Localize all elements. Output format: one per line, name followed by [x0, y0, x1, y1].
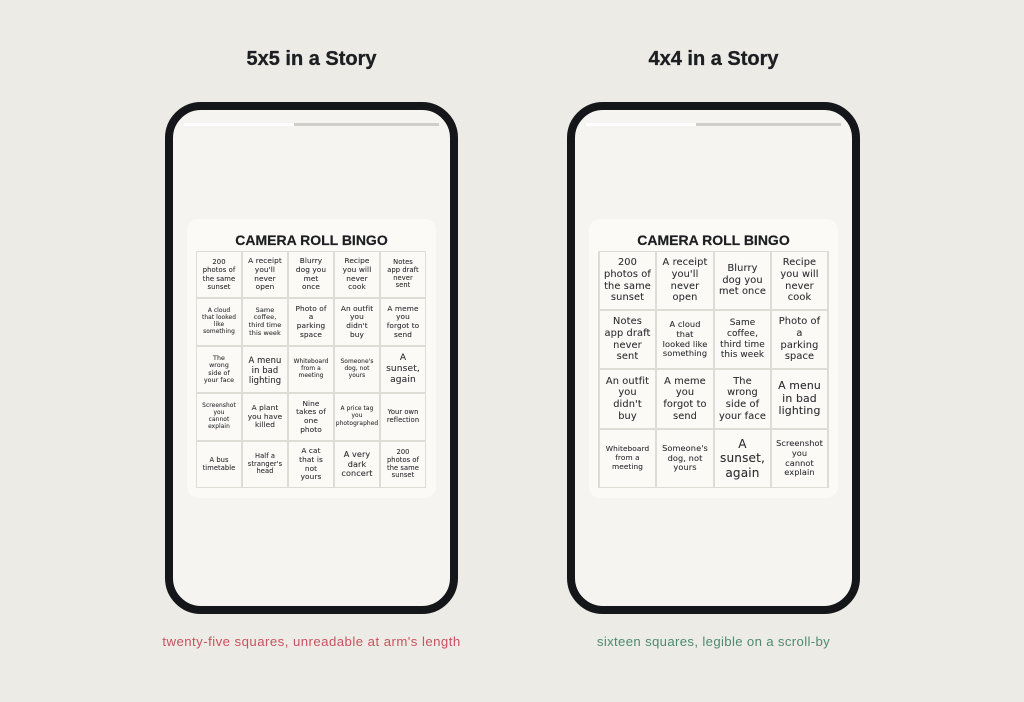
- cell: [772, 370, 827, 428]
- cell: [657, 252, 713, 309]
- cell: you: [396, 312, 410, 321]
- cell: side of: [208, 370, 230, 376]
- cell: cook: [788, 292, 811, 303]
- cell: [600, 430, 655, 487]
- cell: you: [618, 387, 637, 398]
- cell: [335, 347, 379, 392]
- card title: 4x4: CAMERA ROLL BINGO: [637, 232, 790, 248]
- cell: dog, not: [668, 453, 702, 463]
- cell: that: [676, 329, 694, 339]
- cell: one: [304, 416, 318, 425]
- cell: wrong: [209, 362, 229, 369]
- cell: A menu: [249, 354, 281, 364]
- cell: timetable: [203, 464, 235, 472]
- progress bar track: 5x5: [294, 123, 439, 126]
- cell: 200: [618, 257, 637, 268]
- cell: from a: [615, 453, 640, 462]
- progress bar fill: 4x4: [586, 123, 696, 126]
- cell: never: [785, 280, 814, 292]
- cell: Someone's: [340, 359, 374, 365]
- cell: Screenshot: [202, 403, 236, 409]
- cell: third time: [720, 340, 765, 350]
- cell: Photo of: [779, 316, 820, 327]
- cell: An outfit: [341, 304, 373, 313]
- cell: Blurry: [300, 256, 322, 265]
- cell: that looked: [202, 315, 236, 321]
- cell: send: [394, 330, 412, 339]
- cell: [657, 311, 713, 368]
- cell: you will: [780, 269, 819, 280]
- bingo grid: 4x4: [598, 251, 829, 488]
- cell: app draft: [604, 328, 650, 339]
- cell: The: [733, 376, 752, 387]
- cell: you: [351, 413, 363, 419]
- cell: like: [214, 322, 224, 328]
- cell: something: [203, 329, 235, 335]
- caption: 5x5: twenty-five squares, unreadable at arm's length: [162, 634, 461, 649]
- cell: forgot to: [663, 399, 707, 410]
- cell: [289, 252, 333, 297]
- cell: wrong: [727, 387, 758, 398]
- cell: sunset: [611, 292, 644, 303]
- cell: concert: [341, 468, 373, 478]
- cell: a: [309, 312, 313, 321]
- card title: 5x5: CAMERA ROLL BINGO: [235, 232, 388, 248]
- cell: [243, 394, 287, 440]
- cell: open: [673, 292, 697, 303]
- cell: [772, 311, 827, 368]
- cell: again: [725, 466, 760, 480]
- progress bar track: 4x4: [696, 123, 841, 126]
- cell: didn't: [613, 399, 642, 410]
- cell: you: [213, 410, 225, 416]
- cell: forgot to: [387, 321, 419, 330]
- cell: A price tag: [341, 406, 373, 412]
- cell: A cat: [301, 446, 321, 455]
- cell: this week: [249, 329, 281, 337]
- cell: photos of: [604, 269, 651, 280]
- cell: [289, 347, 333, 392]
- cell: reflection: [387, 416, 419, 424]
- cell: the same: [604, 280, 651, 292]
- cell: [381, 347, 425, 392]
- cell: A receipt: [248, 256, 282, 265]
- cell: you'll: [255, 265, 275, 274]
- cell: Notes: [613, 316, 642, 327]
- cell: coffee,: [254, 313, 276, 321]
- cell: [335, 442, 379, 487]
- cell: [381, 252, 425, 297]
- cell: sunset,: [720, 451, 765, 465]
- cell: A cloud: [208, 308, 230, 314]
- cell: this week: [721, 350, 764, 360]
- cell: cannot: [209, 417, 229, 423]
- cell: [197, 252, 241, 297]
- cell: [381, 299, 425, 345]
- cell: [197, 347, 241, 392]
- cell: Recipe: [783, 257, 816, 268]
- cell: An outfit: [606, 376, 649, 387]
- cell: buy: [618, 411, 637, 422]
- cell: [197, 394, 241, 440]
- cell: [197, 442, 241, 487]
- cell: [657, 430, 713, 487]
- cell: a: [796, 328, 803, 339]
- cell: A plant: [252, 403, 278, 412]
- cell: Someone's: [662, 443, 708, 453]
- cell: space: [300, 330, 322, 339]
- cell: third time: [249, 321, 281, 329]
- cell: A meme: [387, 304, 419, 313]
- cell: coffee,: [727, 329, 758, 339]
- caption: 4x4: sixteen squares, legible on a scroll-by: [597, 634, 830, 649]
- cell: The: [213, 355, 225, 362]
- cell: looked like: [663, 338, 707, 348]
- cell: A cloud: [669, 319, 701, 329]
- cell: yours: [301, 472, 321, 481]
- cell: [772, 430, 827, 487]
- cell: never: [671, 280, 699, 292]
- cell: photos of: [387, 456, 419, 464]
- cell: met once: [719, 286, 766, 297]
- cell: Recipe: [344, 256, 370, 265]
- cell: Nine: [302, 399, 320, 408]
- cell: you: [350, 312, 364, 321]
- cell: [289, 394, 333, 440]
- cell: dog you: [296, 265, 326, 274]
- cell: [715, 370, 770, 428]
- cell: dog you: [722, 275, 763, 286]
- cell: explain: [208, 424, 230, 430]
- cell: open: [256, 282, 274, 291]
- cell: Same: [256, 306, 274, 314]
- cell: buy: [350, 330, 364, 339]
- cell: meeting: [299, 373, 323, 379]
- cell: from a: [301, 366, 321, 372]
- cell: Blurry: [727, 263, 758, 274]
- cell: yours: [673, 462, 697, 472]
- cell: space: [785, 351, 814, 362]
- cell: again: [390, 375, 416, 385]
- bingo card: 5x5: [187, 219, 436, 498]
- cell: never: [346, 274, 368, 282]
- cell: sunset: [207, 283, 231, 291]
- cell: sunset,: [386, 364, 420, 374]
- bingo card: 4x4: [589, 219, 838, 498]
- cell: [715, 252, 770, 309]
- cell: [243, 347, 287, 392]
- cell: yours: [349, 373, 365, 379]
- cell: [243, 252, 287, 297]
- heading: 5x5 in a Story: 5x5 in a Story: [246, 48, 377, 70]
- cell: didn't: [346, 321, 368, 330]
- cell: [657, 370, 713, 428]
- cell: Notes: [393, 258, 413, 266]
- cell: A very: [344, 449, 370, 459]
- cell: [197, 299, 241, 345]
- cell: Photo of: [295, 304, 327, 313]
- cell: head: [256, 467, 274, 475]
- cell: A bus: [209, 456, 229, 464]
- cell: in bad: [252, 364, 278, 374]
- cell: Your own: [388, 408, 418, 416]
- cell: [715, 311, 770, 368]
- cell: [600, 252, 655, 309]
- cell: Half a: [255, 452, 275, 460]
- cell: sunset: [392, 471, 414, 479]
- cell: send: [673, 411, 697, 422]
- cell: the same: [387, 464, 419, 472]
- cell: stranger's: [248, 460, 282, 468]
- cell: [381, 442, 425, 487]
- cell: [335, 252, 379, 297]
- cell: you'll: [672, 269, 698, 280]
- cell: not: [305, 464, 317, 472]
- cell: Same: [730, 318, 755, 328]
- cell: once: [302, 282, 320, 291]
- cell: [600, 370, 655, 428]
- bingo grid: 5x5: [196, 251, 426, 488]
- cell: that is: [299, 455, 323, 464]
- cell: cook: [348, 282, 366, 291]
- cell: parking: [297, 321, 325, 330]
- cell: [600, 311, 655, 368]
- cell: Whiteboard: [606, 444, 649, 453]
- cell: lighting: [249, 374, 281, 384]
- cell: Whiteboard: [294, 359, 328, 365]
- cell: you: [676, 387, 694, 398]
- cell: sent: [617, 351, 638, 362]
- cell: met: [304, 274, 318, 282]
- cell: something: [663, 348, 707, 358]
- cell: [335, 299, 379, 345]
- cell: parking: [781, 340, 818, 350]
- cell: [243, 299, 287, 345]
- cell: you have: [248, 412, 282, 421]
- cell: [772, 252, 827, 309]
- cell: meeting: [612, 462, 643, 471]
- cell: dog, not: [344, 366, 370, 372]
- heading: 4x4 in a Story: 4x4 in a Story: [648, 48, 779, 70]
- cell: you will: [343, 265, 371, 274]
- cell: cannot: [785, 458, 814, 468]
- progress bar fill: 5x5: [184, 123, 294, 126]
- cell: your face: [719, 411, 766, 422]
- cell: dark: [348, 459, 366, 469]
- cell: Screenshot: [776, 438, 823, 448]
- phone frame: 5x5: [165, 102, 458, 614]
- cell: never: [254, 274, 276, 282]
- cell: in bad: [782, 392, 817, 405]
- cell: photographed: [336, 420, 378, 426]
- cell: photo: [300, 425, 322, 434]
- cell: A: [400, 353, 406, 363]
- cell: the same: [203, 274, 235, 282]
- cell: killed: [255, 420, 275, 429]
- cell: never: [613, 340, 642, 350]
- cell: A menu: [778, 379, 821, 392]
- cell: A meme: [664, 376, 706, 387]
- cell: [381, 394, 425, 440]
- cell: sent: [396, 281, 410, 289]
- cell: 200: [396, 448, 410, 456]
- cell: explain: [784, 467, 815, 477]
- cell: takes of: [296, 407, 326, 416]
- cell: side of: [726, 399, 759, 410]
- cell: your face: [204, 377, 234, 384]
- cell: A: [738, 437, 747, 451]
- cell: [243, 442, 287, 487]
- cell: photos of: [203, 266, 235, 274]
- cell: A receipt: [663, 257, 707, 268]
- cell: [715, 430, 770, 487]
- cell: 200: [212, 258, 226, 266]
- cell: lighting: [778, 404, 821, 417]
- cell: [335, 394, 379, 440]
- cell: never: [393, 274, 413, 282]
- cell: [289, 442, 333, 487]
- cell: app draft: [387, 266, 419, 274]
- phone frame: 4x4: [567, 102, 860, 614]
- cell: [289, 299, 333, 345]
- cell: you: [792, 448, 807, 458]
